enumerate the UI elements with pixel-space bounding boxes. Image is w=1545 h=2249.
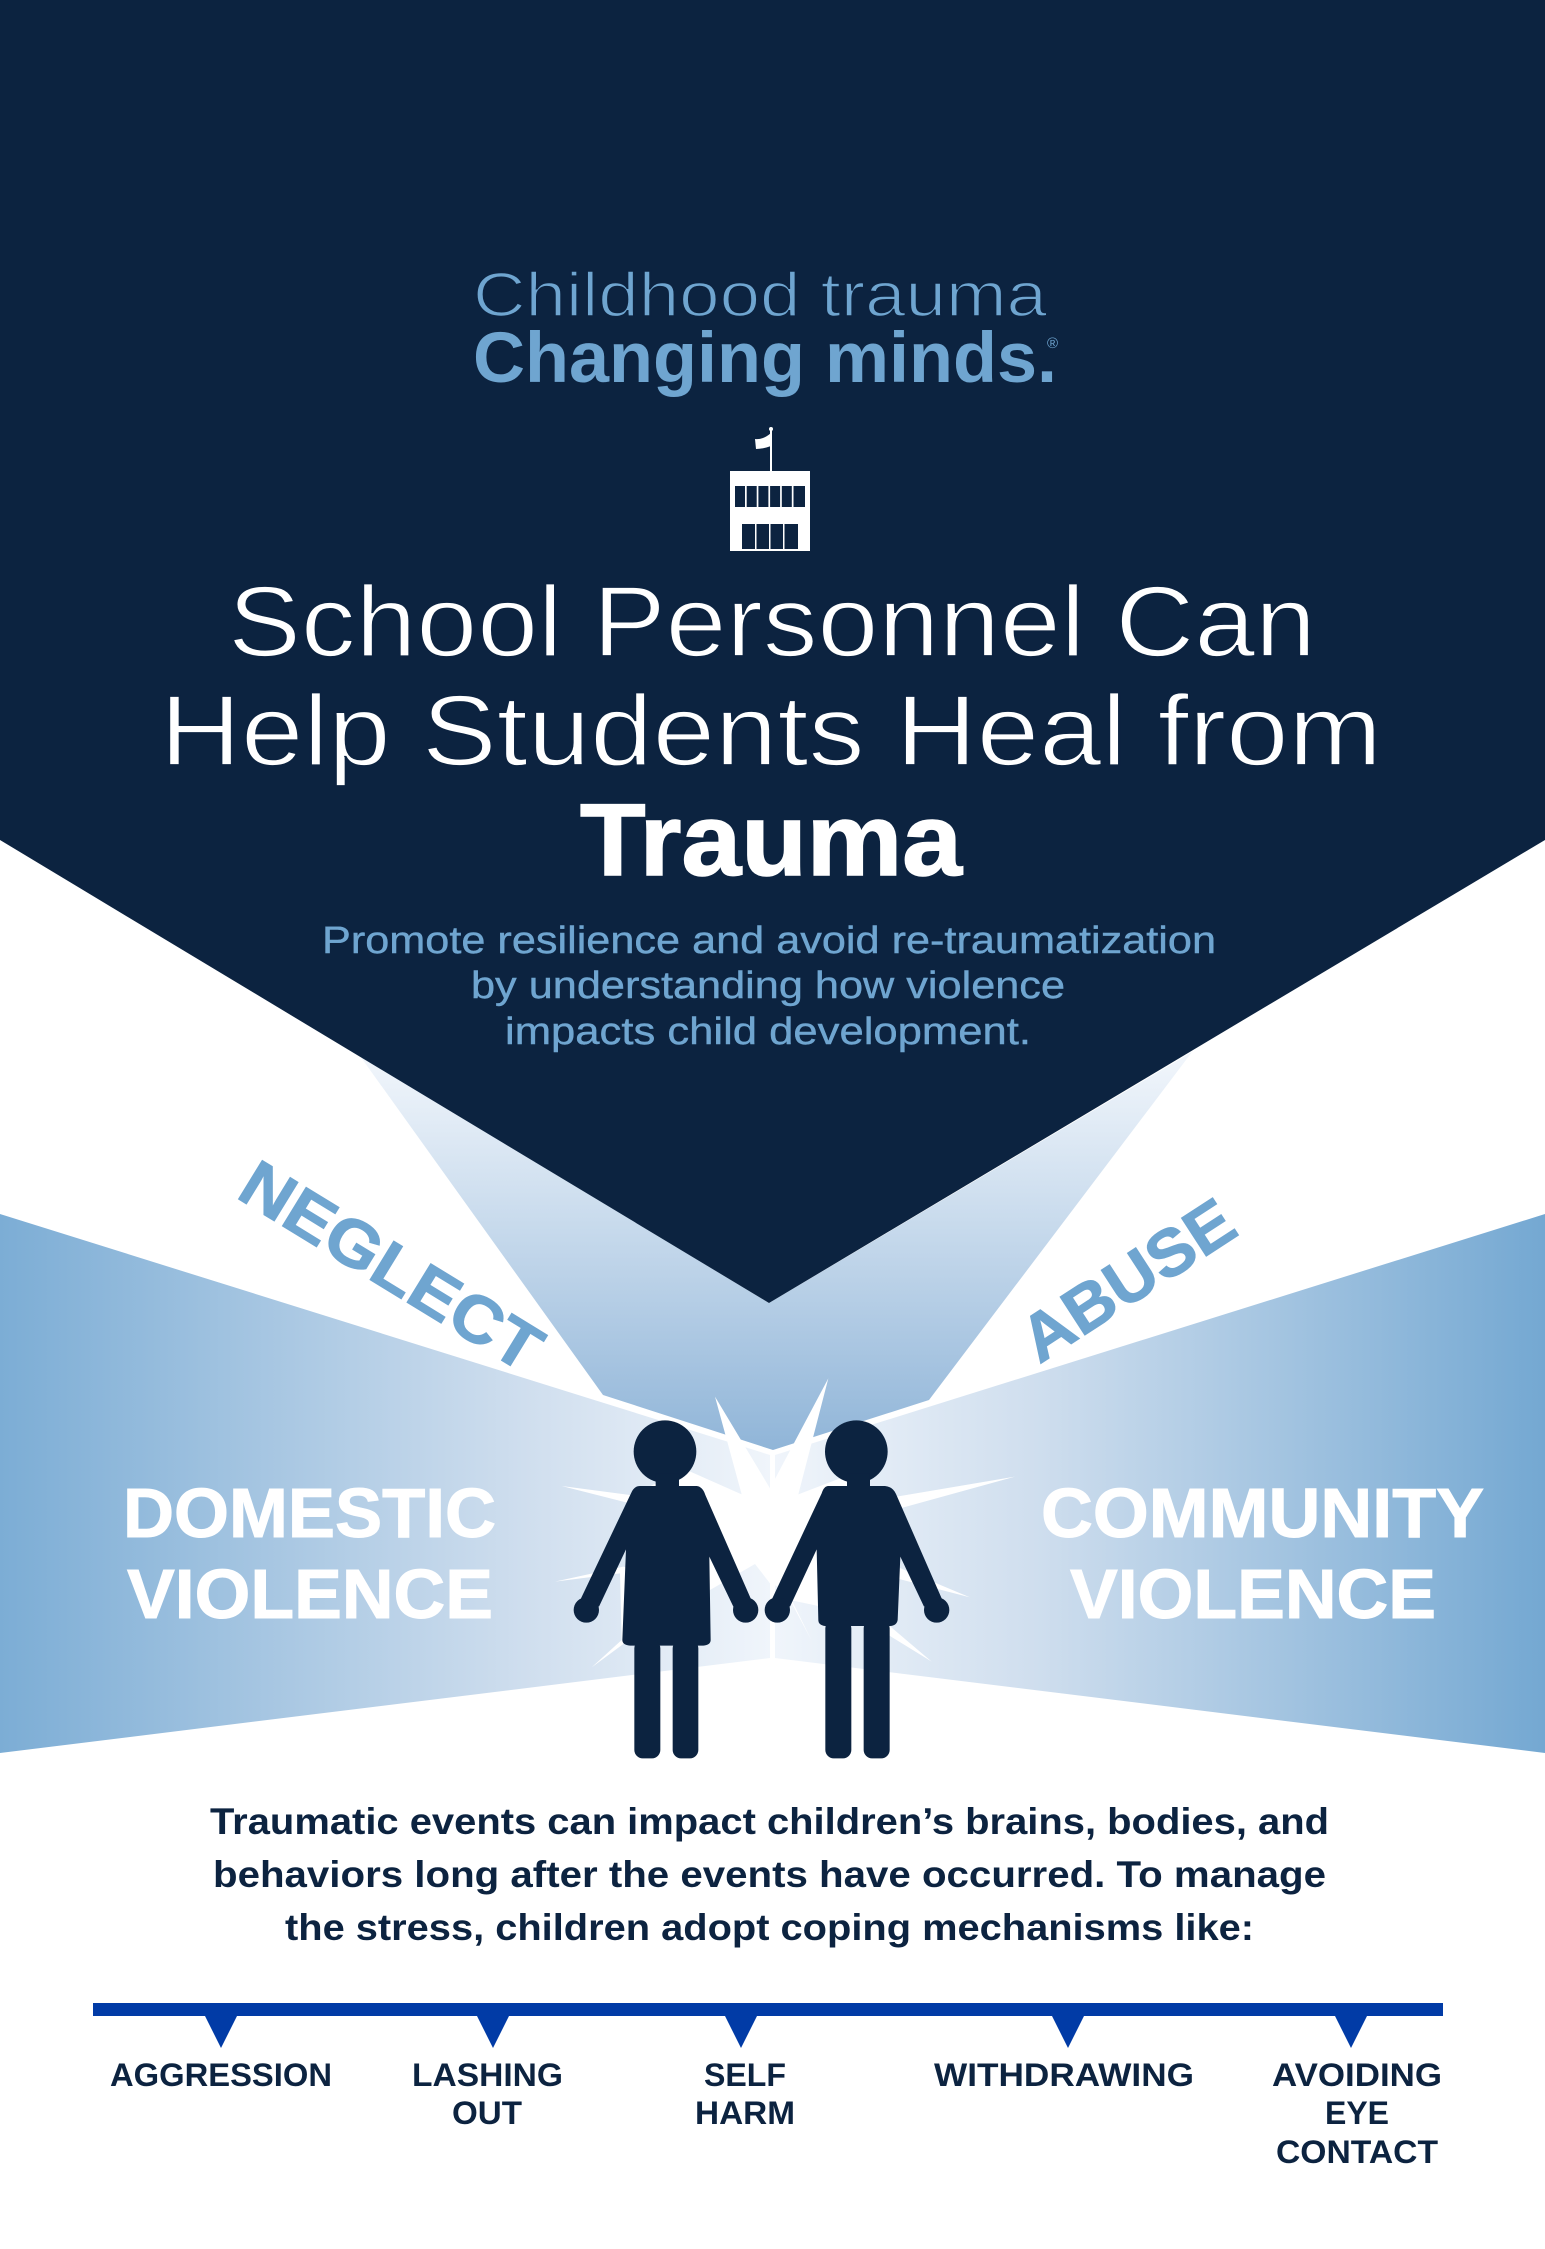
text block: traumatic events: the stress, children adopt coping mechanisms like: [285,1907,1254,1948]
panel: community violence beam [775,1214,1545,1753]
registered mark: ® [1047,335,1058,352]
timeline bar with markers [93,2003,1443,2048]
title line three: Trauma [580,783,963,897]
label: avoiding eye contact: EYE [1325,2095,1389,2131]
subtitle [322,920,1216,1053]
label: community violence: COMMUNITY [1041,1474,1484,1552]
label: community violence [1041,1474,1484,1633]
label: avoiding eye contact: CONTACT [1276,2134,1438,2170]
burst: white star behind figures [555,1378,1015,1667]
icon: child figure left [574,1420,758,1758]
subtitle: Promote resilience and avoid re-traumatization [322,920,1216,962]
title line one: School Personnel Can [228,566,1316,678]
logo line two: Changing minds. [473,319,1057,398]
label: self harm [695,2057,795,2131]
panel: domestic violence beam [0,1214,770,1753]
label: aggression: AGGRESSION [110,2057,332,2093]
label: self harm: SELF [704,2057,786,2093]
panel: dark header [0,0,1545,1303]
icon: school building [730,427,810,551]
label: lashing out: OUT [452,2095,522,2131]
label: avoiding eye contact [1272,2057,1442,2170]
label: domestic violence: VIOLENCE [127,1555,493,1633]
label: avoiding eye contact: AVOIDING [1272,2057,1442,2093]
logo line one: Childhood trauma [473,261,1048,330]
icon: child figure right [765,1420,949,1758]
label: lashing out: LASHING [412,2057,563,2093]
text block: traumatic events: behaviors long after the events have occurred. To manage [213,1854,1326,1895]
subtitle: by understanding how violence [471,965,1065,1007]
label: lashing out [412,2057,563,2131]
panel: central light beam [360,1052,1192,1450]
label: neglect: NEGLECT [227,1145,556,1386]
label: domestic violence: DOMESTIC [123,1474,496,1552]
label: self harm: HARM [695,2095,795,2131]
subtitle: impacts child development. [505,1011,1031,1053]
label: withdrawing: WITHDRAWING [934,2057,1194,2093]
coping mechanism labels [110,2057,1442,2170]
text block: traumatic events [210,1801,1329,1948]
label: community violence: VIOLENCE [1070,1555,1436,1633]
logo: Childhood trauma Changing minds [473,261,1058,398]
title [160,566,1382,897]
title line two: Help Students Heal from [160,675,1382,787]
text block: traumatic events: Traumatic events can impact children’s brains, bodies, and [210,1801,1329,1842]
label: abuse: ABUSE [1007,1183,1248,1376]
label: domestic violence [123,1474,496,1633]
